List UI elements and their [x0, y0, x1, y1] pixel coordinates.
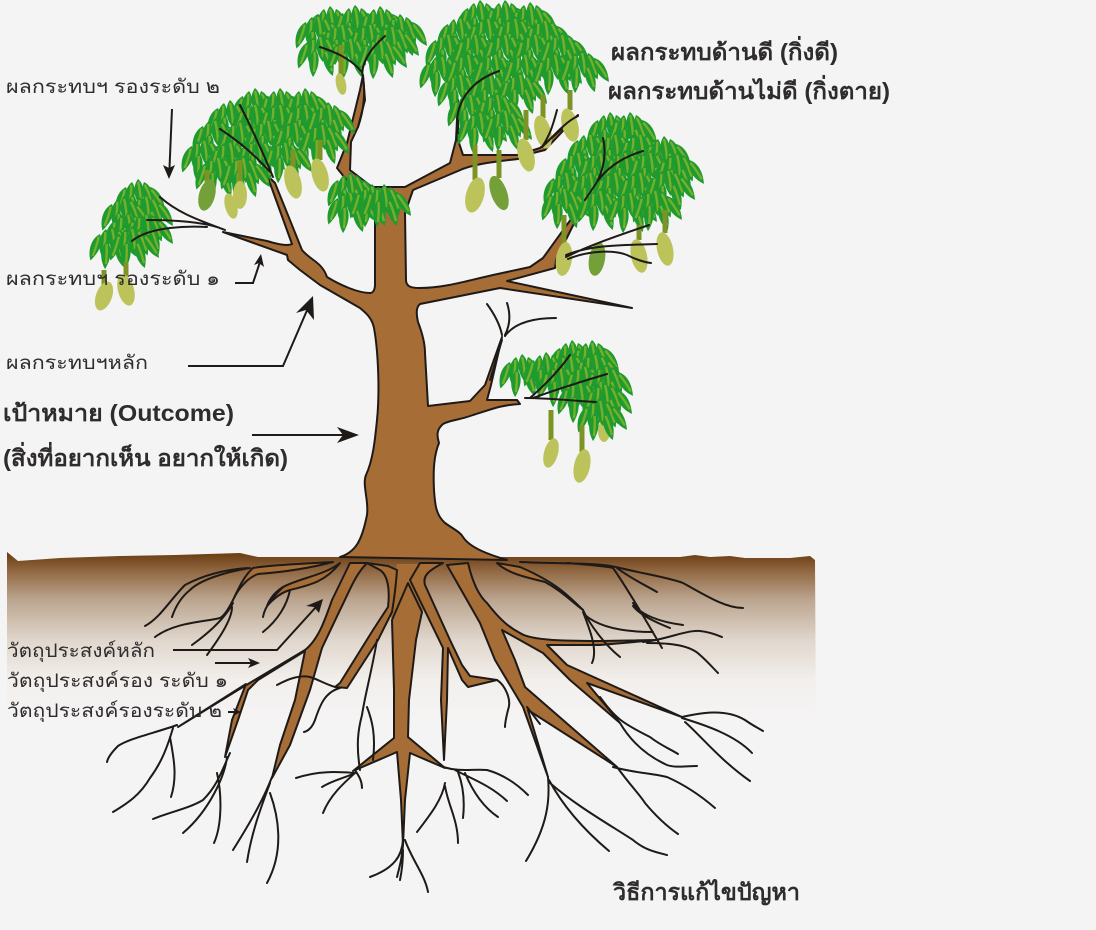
arrow: level 1 objective — [215, 658, 260, 668]
arrow: main objective — [173, 599, 323, 650]
tree trunk and branches — [223, 75, 632, 560]
label: main objective: วัตถุประสงค์หลัก — [7, 640, 155, 663]
canopy: lower right — [495, 340, 636, 442]
canopy: centre small — [323, 172, 414, 234]
fruit behind leaves — [598, 420, 610, 442]
label: bad branches: ผลกระทบด้านไม่ดี (กิ่งตาย) — [608, 74, 890, 104]
root: upper left — [233, 562, 333, 600]
root: central taproot — [353, 583, 445, 845]
fruits — [195, 177, 219, 213]
root: main right — [447, 563, 682, 777]
soil band — [7, 552, 816, 720]
fruit and stems — [91, 45, 676, 484]
arrow: outcome — [252, 427, 359, 443]
label: main impact: ผลกระทบฯหลัก — [6, 353, 148, 374]
stems — [104, 45, 665, 452]
canopy: far left — [85, 179, 176, 270]
fine rootlets — [107, 562, 763, 892]
ground line — [350, 556, 486, 558]
root crown fill — [388, 564, 428, 620]
label: outcome description: (สิ่งที่อยากเห็น อยากให้เกิด) — [3, 441, 288, 471]
root: upper right — [497, 563, 583, 610]
label: level 2 impact: ผลกระทบฯ รองระดับ ๒ — [6, 77, 220, 98]
twig thick: lower fork — [490, 340, 502, 380]
canopy: top right — [415, 0, 612, 154]
label: level 2 objective: วัตถุประสงค์รองระดับ ๒ — [7, 700, 222, 723]
label: level 1 objective: วัตถุประสงค์รอง ระดับ ๑ — [7, 670, 228, 693]
canopy: right — [537, 112, 707, 234]
canopy: upper left — [177, 88, 358, 199]
arrow: level 2 impact — [163, 109, 175, 179]
root: main left — [178, 563, 367, 778]
branch twigs — [132, 36, 657, 402]
arrow: level 1 impact — [235, 254, 264, 283]
root: inner right — [410, 563, 497, 760]
root: upper left second — [267, 563, 340, 606]
root: inner left — [335, 563, 397, 688]
label: outcome: เป้าหมาย (Outcome) — [3, 400, 234, 426]
arrow: level 2 objective — [228, 708, 241, 716]
label: good branches: ผลกระทบด้านดี (กิ่งดี) — [611, 35, 838, 65]
tree roots — [107, 557, 763, 892]
label: level 1 impact: ผลกระทบฯ รองระดับ ๑ — [6, 269, 220, 290]
arrow: main impact — [188, 296, 314, 366]
canopy: top centre — [291, 5, 430, 80]
label: solutions: วิธีการแก้ไขปัญหา — [612, 878, 800, 906]
